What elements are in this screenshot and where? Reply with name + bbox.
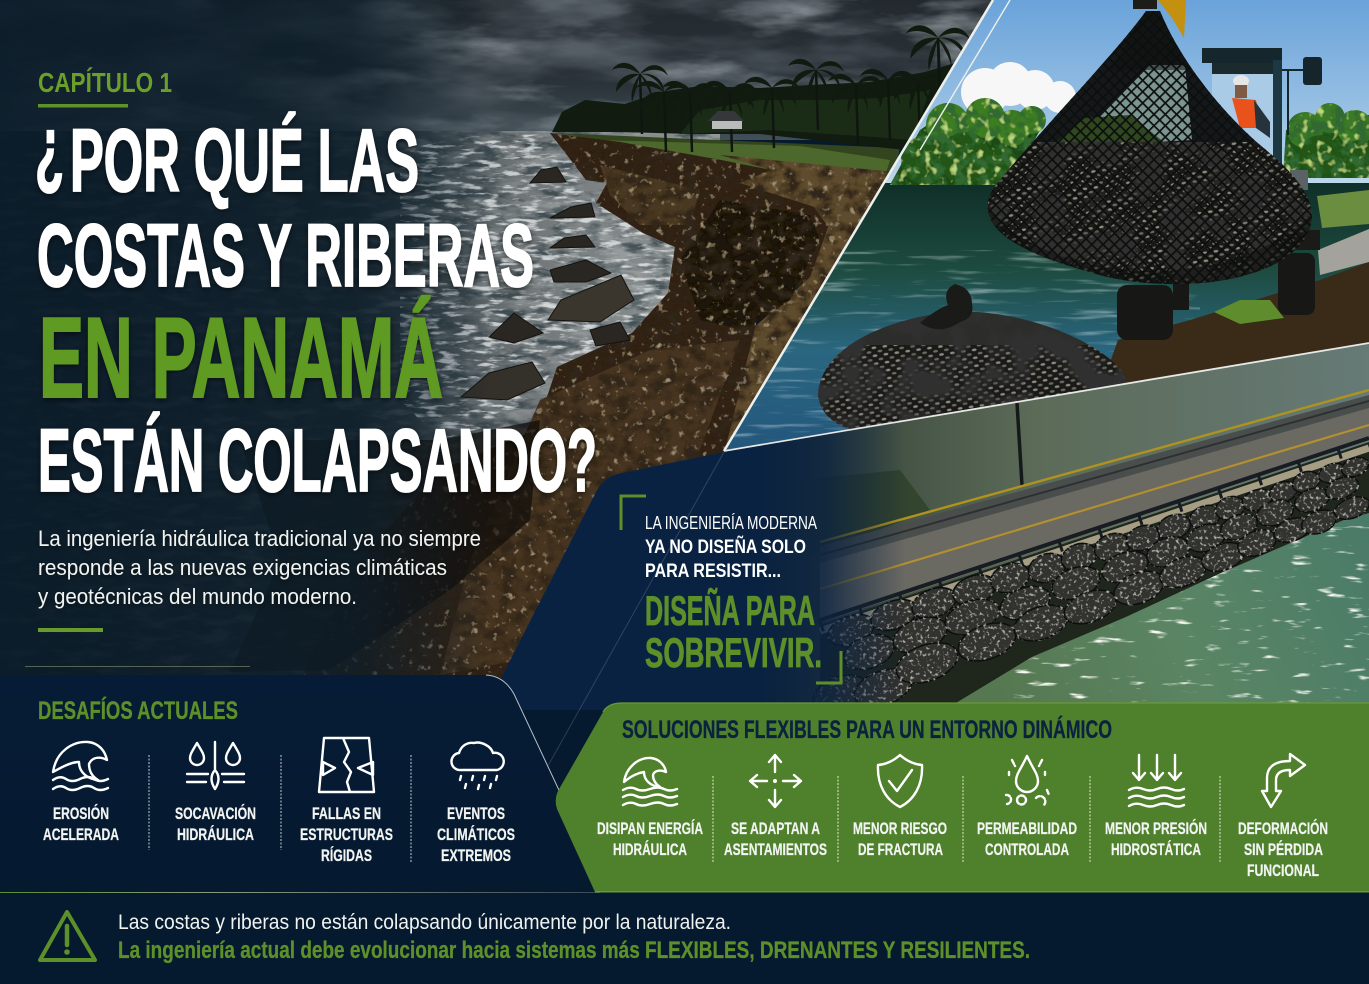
photo dividers: [724, 0, 1369, 451]
item: deformación sin pérdida funcional: SIN PÉRDIDA: [1244, 840, 1323, 859]
callout: ingeniería moderna: PARA RESISTIR...: [645, 560, 781, 582]
net bag on the shore: [818, 312, 1125, 429]
tyres: [1117, 253, 1315, 340]
lamp post: [1017, 403, 1022, 485]
road: [820, 390, 1369, 623]
item: permeabilidad controlada: CONTROLADA: [985, 840, 1069, 859]
title: POR QUÉ LAS: [70, 110, 419, 210]
item: erosión acelerada: [43, 742, 119, 844]
item: erosión acelerada: EROSIÓN: [53, 804, 109, 823]
water: [957, 513, 1369, 702]
item: deformación sin pérdida funcional: DEFORMACIÓN: [1238, 819, 1328, 838]
callout: ingeniería moderna: [621, 496, 841, 683]
item: fallas en estructuras rígidas: [300, 738, 393, 865]
right river bank trees: [1283, 103, 1369, 178]
item: menor presión hidrostática: [1105, 755, 1207, 859]
intro paragraph: La ingeniería hidráulica tradicional ya no siempre: [38, 526, 481, 551]
tree line with palms: [552, 25, 970, 152]
item: fallas en estructuras rígidas: ESTRUCTURAS: [300, 825, 393, 844]
item: se adaptan a asentamientos: ASENTAMIENTOS: [724, 840, 827, 859]
intro paragraph: responde a las nuevas exigencias climáticas: [38, 555, 447, 580]
item: deformación sin pérdida funcional: FUNCIONAL: [1247, 861, 1319, 880]
chapter label: CAPÍTULO 1: [38, 67, 172, 98]
title: EN PANAMÁ: [39, 295, 443, 422]
title: ESTÁN COLAPSANDO?: [38, 410, 597, 510]
item: menor presión hidrostática: HIDROSTÁTICA: [1111, 840, 1201, 859]
callout: ingeniería moderna: YA NO DISEÑA SOLO: [645, 535, 806, 558]
icon: warning triangle: [40, 912, 95, 960]
panel: desafíos actuales: [0, 675, 600, 892]
panel: callout navy backdrop: [495, 405, 1000, 780]
item: se adaptan a asentamientos: SE ADAPTAN A: [731, 819, 820, 838]
item: menor riesgo de fractura: [853, 755, 947, 859]
item: disipan energía hidráulica: DISIPAN ENERGÍA: [597, 819, 703, 838]
callout text: LA INGENIERÍA MODERNA: [645, 512, 817, 533]
corner bracket top left: [621, 496, 646, 530]
photo: road protected by geotextile bags: [722, 344, 1369, 702]
item: eventos climáticos extremos: CLIMÁTICOS: [437, 825, 515, 844]
gabion bags: [808, 454, 1369, 718]
item: socavación hidráulica: SOCAVACIÓN: [175, 804, 256, 823]
item: fallas en estructuras rígidas: FALLAS EN: [312, 804, 381, 823]
ground and right bank: [1100, 0, 1369, 390]
item: permeabilidad controlada: [977, 756, 1077, 859]
conclusion text: Las costas y riberas no están colapsando únicamente por la naturaleza.: [118, 911, 731, 934]
heading: DESAFÍOS ACTUALES: [38, 696, 238, 725]
item: se adaptan a asentamientos: [724, 755, 827, 859]
chapter label: [38, 67, 172, 108]
title: ¿: [35, 97, 64, 197]
item: erosión acelerada: ACELERADA: [43, 825, 119, 844]
conclusion emphasis: La ingeniería actual debe evolucionar hacia sistemas más FLEXIBLES, DRENANTES Y RESILIENTES.: [118, 937, 1030, 964]
callout: ingeniería moderna: SOBREVIVIR.: [645, 629, 822, 676]
title: COSTAS Y RIBERAS: [37, 205, 534, 305]
item: fallas en estructuras rígidas: RÍGIDAS: [321, 846, 372, 865]
rock-filled net bag: [988, 11, 1312, 284]
item: permeabilidad controlada: PERMEABILIDAD: [977, 819, 1077, 838]
left river bank trees: [890, 98, 1046, 185]
intro paragraph: [38, 526, 481, 609]
item: deformación sin pérdida funcional: [1238, 754, 1328, 880]
corner bracket bottom right: [816, 651, 841, 683]
item: socavación hidráulica: [175, 742, 256, 844]
item: eventos climáticos extremos: EXTREMOS: [441, 846, 511, 865]
item: eventos climáticos extremos: [437, 743, 515, 865]
intro paragraph: y geotécnicas del mundo moderno.: [38, 584, 357, 609]
item: disipan energía hidráulica: [597, 758, 703, 859]
item: menor riesgo de fractura: DE FRACTURA: [858, 840, 943, 859]
callout emphasis: DISEÑA PARA: [645, 587, 815, 634]
heading: SOLUCIONES FLEXIBLES PARA UN ENTORNO DINÁMICO: [622, 715, 1112, 744]
item: disipan energía hidráulica: HIDRÁULICA: [613, 840, 687, 859]
item: menor riesgo de fractura: MENOR RIESGO: [853, 819, 947, 838]
panel: soluciones flexibles: [556, 703, 1369, 892]
photo: storm coast with eroding cliff: [0, 0, 1000, 681]
title: [35, 97, 597, 510]
excavator cab: [1202, 48, 1322, 250]
rocks on the shore: [461, 167, 634, 400]
accent rule: [38, 628, 103, 632]
cliff and rubble: [300, 133, 895, 680]
item: socavación hidráulica: HIDRÁULICA: [177, 825, 254, 844]
photo: excavator lifting rock-filled net bag: [720, 0, 1369, 460]
panel: bottom conclusion band: [0, 891, 1369, 984]
item: eventos climáticos extremos: EVENTOS: [447, 804, 505, 823]
item: menor presión hidrostática: MENOR PRESIÓN: [1105, 819, 1207, 838]
